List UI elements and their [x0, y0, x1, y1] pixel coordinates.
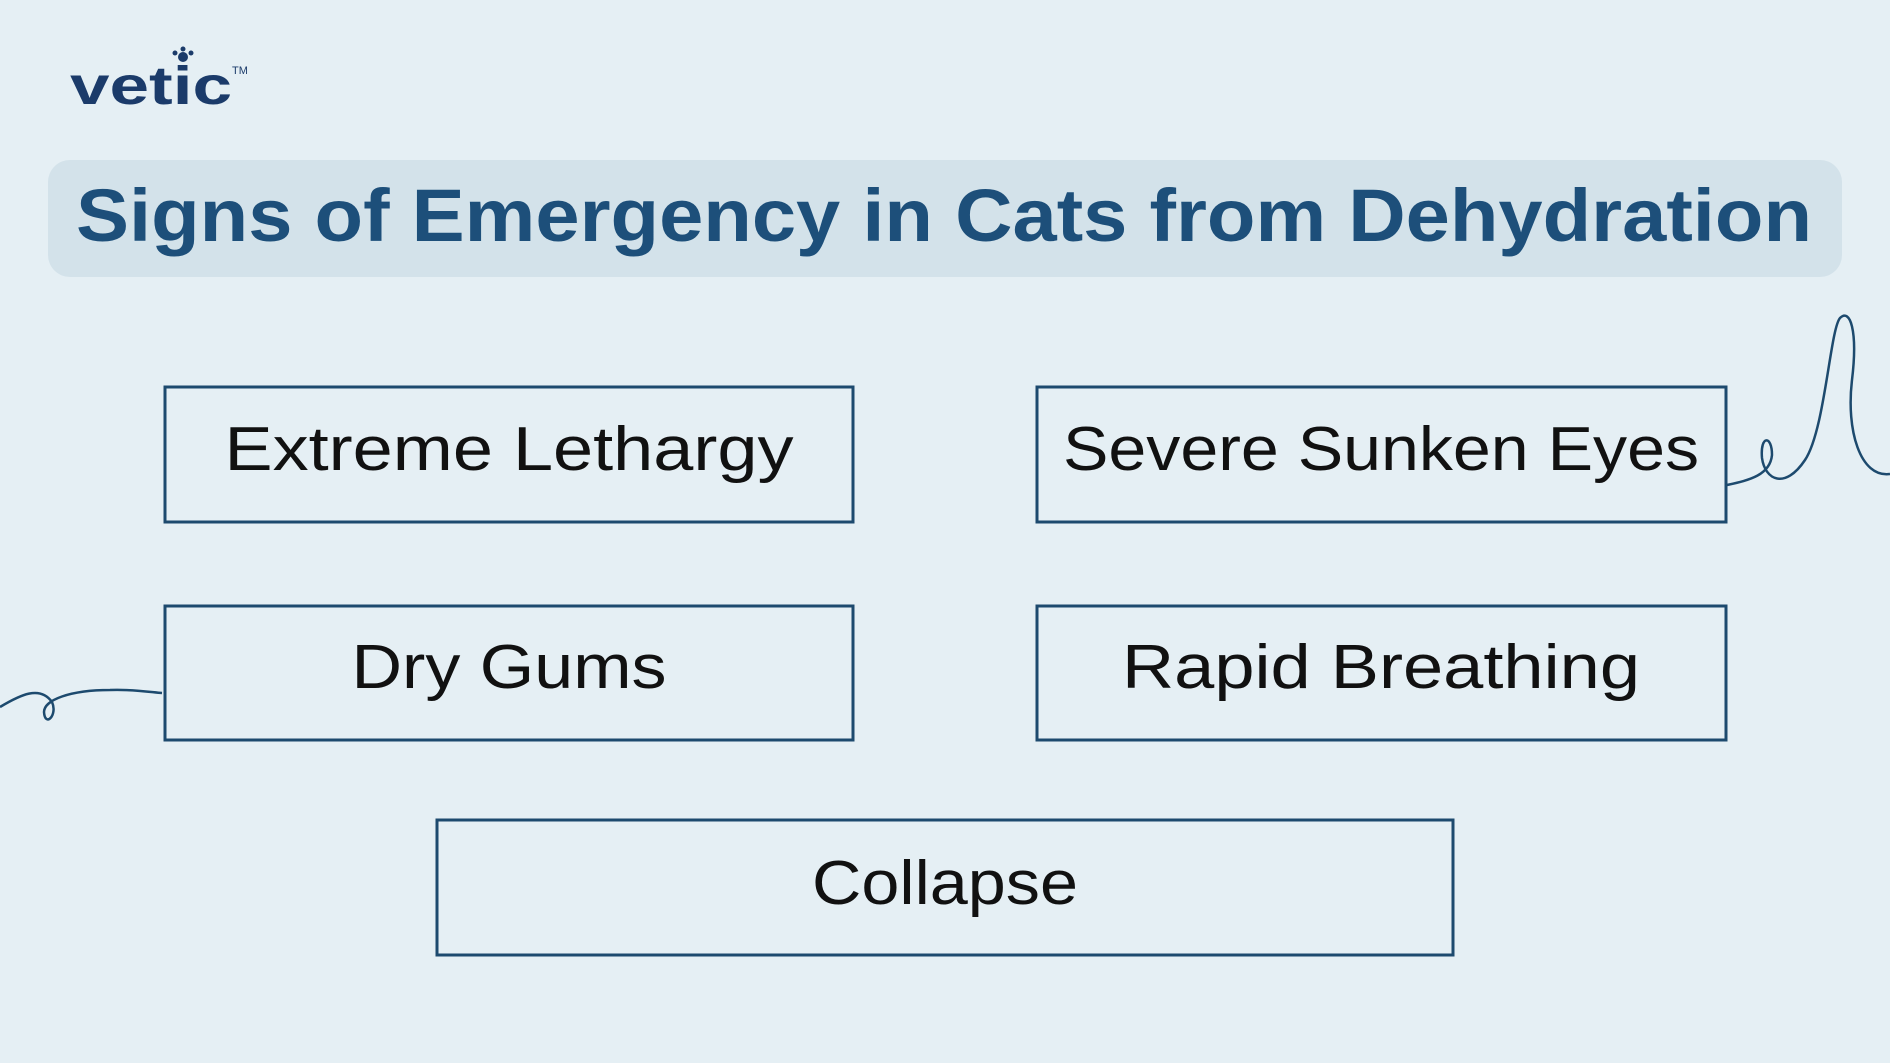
box: Dry Gums: Dry Gums	[352, 633, 666, 702]
title banner	[48, 160, 1842, 277]
box: Severe Sunken Eyes: Severe Sunken Eyes	[1063, 415, 1699, 484]
box: Dry Gums	[165, 606, 853, 740]
box: Extreme Lethargy: Extreme Lethargy	[224, 415, 794, 484]
logo: vetic	[70, 46, 248, 116]
title banner: Signs of Emergency in Cats from Dehydration	[76, 174, 1812, 257]
box: Rapid Breathing	[1037, 606, 1726, 740]
logo: vetic: vetic	[70, 56, 232, 116]
box: Collapse	[437, 820, 1453, 955]
box: Extreme Lethargy	[165, 387, 853, 522]
box: Collapse: Collapse	[812, 849, 1078, 918]
box: Severe Sunken Eyes	[1037, 387, 1726, 522]
logo: vetic: TM	[232, 65, 248, 77]
box: Rapid Breathing: Rapid Breathing	[1122, 633, 1640, 702]
decorative curl left	[0, 690, 162, 719]
decorative curl right	[1727, 316, 1890, 485]
